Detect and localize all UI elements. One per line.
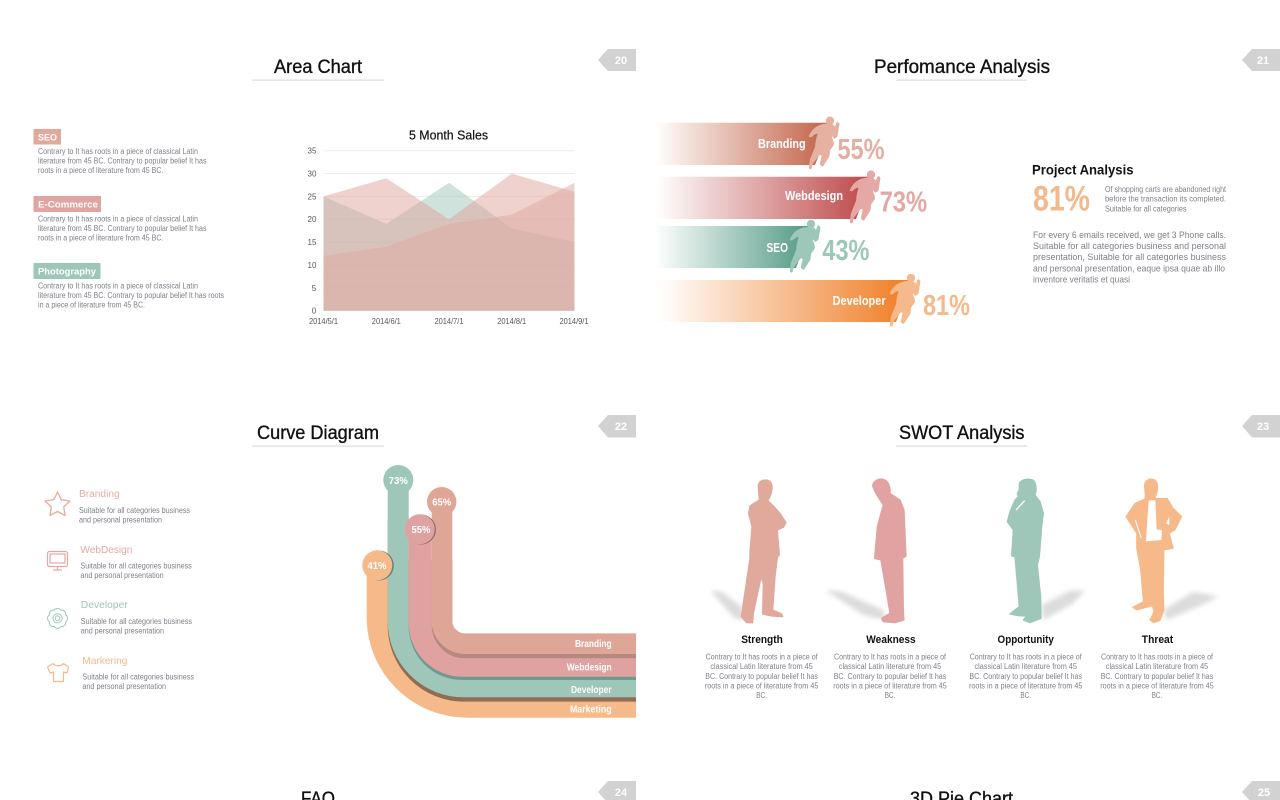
- area chart: 5 Month Sales: 2014/7/1: [434, 317, 464, 326]
- stat: 81%: 81%: [1033, 180, 1090, 219]
- area chart: 5 Month Sales: 2014/5/1: [309, 317, 339, 326]
- page badge 21: 21: [1257, 55, 1269, 67]
- page badge 24: 24: [615, 787, 628, 799]
- page badge 20: 20: [615, 55, 627, 67]
- text block: Strength: Strength: [741, 634, 783, 646]
- text block: Strength: BC.: [756, 691, 767, 700]
- text block: Weakness: [833, 634, 947, 700]
- text block: Weakness: BC. Contrary to popular belief It has: [834, 672, 946, 681]
- text block: Strength: Contrary to It has roots in a piece of: [706, 652, 818, 662]
- text block: Threat: BC.: [1152, 691, 1162, 700]
- area chart: 5 Month Sales: 35: [308, 147, 317, 156]
- bar: SEO 43%: [650, 221, 870, 271]
- text block: Weakness: classical Latin literature from 45: [839, 662, 942, 671]
- icon: monitor: [48, 552, 68, 570]
- page badge 22: [598, 415, 636, 438]
- panel: 3D pie chart slide (cropped): [910, 781, 1280, 800]
- page badge 25: [1242, 781, 1280, 800]
- text block: Opportunity: Contrary to It has roots in a piece of: [970, 652, 1082, 662]
- text block: Strength: [705, 634, 819, 700]
- text block: E-Commerce: E-Commerce: [38, 200, 98, 210]
- bar: SEO 43%: SEO: [766, 240, 788, 255]
- circle 65%: [427, 487, 456, 516]
- area chart: 5 Month Sales: 2014/8/1: [497, 317, 527, 326]
- page badge 21: [1242, 49, 1280, 71]
- legend item: WebDesign: WebDesign: [80, 545, 132, 556]
- text block: Photography: in a piece of literature from 45 BC.: [38, 300, 145, 310]
- page badge 22: 22: [615, 421, 627, 433]
- circle 55%: 55%: [412, 524, 431, 536]
- legend item: Developer: and personal presentation: [81, 626, 164, 636]
- text block: E-Commerce: [34, 196, 206, 242]
- text block: Threat: Threat: [1142, 634, 1174, 646]
- page badge 25: 25: [1258, 787, 1270, 799]
- text block: Project Analysis: inventore veritatis et quasi: [1033, 274, 1130, 286]
- page badge 20: [598, 49, 636, 71]
- band label: Developer: Developer: [571, 684, 612, 696]
- heading: Curve Diagram: Curve Diagram: [257, 423, 379, 444]
- figure: Threat: [1126, 479, 1218, 623]
- figure: Weakness: [825, 479, 906, 623]
- page badge 23: [1242, 415, 1280, 438]
- heading: Area Chart: Area Chart: [274, 57, 363, 78]
- text block: Opportunity: [969, 634, 1083, 700]
- text block: Strength: classical Latin literature from 45: [710, 662, 813, 671]
- legend item: Branding: [45, 489, 190, 524]
- legend item: WebDesign: Suitable for all categories business: [80, 562, 192, 570]
- text block: Project Analysis: Of shopping carts are abandoned right: [1105, 185, 1227, 194]
- text block: E-Commerce: literature from 45 BC. Contrary to popular belief It has: [38, 224, 206, 233]
- band: Developer: [398, 480, 636, 691]
- legend item: Branding: Suitable for all categories business: [79, 506, 190, 515]
- page badge 23: 23: [1257, 421, 1269, 433]
- text block: Photography: literature from 45 BC. Contrary to popular belief It has roots: [38, 291, 224, 300]
- text block: Strength: BC. Contrary to popular belief It has: [705, 672, 818, 681]
- text block: Photography: [34, 263, 224, 310]
- text block: Project Analysis: before the transaction its completed.: [1105, 195, 1226, 204]
- panel: SWOT analysis slide: [705, 415, 1280, 700]
- icon: t-shirt: [48, 664, 68, 682]
- legend item: Markering: and personal presentation: [82, 682, 166, 691]
- area chart: 5 Month Sales: 30: [308, 170, 317, 178]
- text block: Project Analysis: Suitable for all categories: [1105, 204, 1186, 214]
- area chart: 5 Month Sales: 15: [308, 238, 317, 247]
- text block: Strength: roots in a piece of literature from 45: [705, 682, 819, 690]
- band: Webdesign: [420, 530, 636, 668]
- heading: SWOT Analysis: SWOT Analysis: [899, 423, 1024, 444]
- text block: Project Analysis: Project Analysis: [1032, 162, 1134, 178]
- text block: Weakness: Weakness: [866, 634, 916, 646]
- area chart: 5 Month Sales: 2014/9/1: [560, 317, 589, 326]
- bar: Branding 55%: 55%: [838, 134, 885, 166]
- legend item: Markering: Markering: [82, 656, 127, 667]
- bar: Webdesign 73%: 73%: [880, 187, 927, 219]
- panel: performance analysis slide: [650, 49, 1280, 325]
- bar: Developer 81%: [650, 275, 970, 325]
- circle 55%: [405, 514, 436, 544]
- text block: Opportunity: BC.: [1020, 691, 1031, 700]
- bar: Branding 55%: Branding: [758, 136, 806, 151]
- band label: Marketing: Marketing: [570, 704, 612, 716]
- icon: gear: [48, 608, 67, 628]
- circle 73%: 73%: [389, 475, 408, 487]
- bar: Developer 81%: Developer: [833, 293, 886, 308]
- text block: Threat: Contrary to It has roots in a piece of: [1101, 652, 1214, 662]
- area chart: 5 Month Sales: 5: [312, 284, 317, 293]
- text block: SEO: SEO: [38, 132, 57, 144]
- text block: E-Commerce: roots in a piece of literature from 45 BC.: [38, 234, 164, 242]
- bar: Webdesign 73%: Webdesign: [785, 188, 843, 203]
- curve chart: [362, 465, 636, 716]
- text block: E-Commerce: Contrary to It has roots in a piece of classical Latin: [38, 214, 198, 224]
- icon: star: [45, 492, 70, 516]
- text block: Photography: Contrary to It has roots in a piece of classical Latin: [38, 282, 198, 290]
- legend item: WebDesign: [48, 545, 192, 580]
- bar: Branding 55%: [650, 118, 885, 168]
- text block: Project Analysis: Suitable for all categories business and personal: [1033, 241, 1226, 252]
- chart title: 5 Month Sales: [409, 128, 488, 142]
- area chart: 5 Month Sales: 10: [308, 261, 317, 270]
- text block: SEO: roots in a piece of literature from 45 BC.: [38, 166, 164, 175]
- band label: Branding: Branding: [575, 638, 612, 650]
- bar: Developer 81%: 81%: [923, 290, 970, 322]
- heading: Perfomance Analysis: Perfomance Analysis: [874, 57, 1050, 78]
- legend item: Developer: Developer: [81, 600, 128, 611]
- text block: Opportunity: classical Latin literature from 45: [974, 662, 1077, 671]
- text block: Weakness: Contrary to It has roots in a piece of: [834, 652, 947, 662]
- text block: Project Analysis: presentation, Suitable for all categories business: [1033, 252, 1226, 263]
- area chart: 5 Month Sales: 25: [308, 192, 317, 201]
- text block: Weakness: BC.: [885, 691, 895, 700]
- area chart: 5 Month Sales: 2014/6/1: [372, 317, 401, 326]
- figure: Strength: [710, 480, 786, 623]
- text block: Weakness: roots in a piece of literature from 45: [833, 682, 947, 690]
- text block: Opportunity: Opportunity: [998, 634, 1055, 646]
- band label: Webdesign: Webdesign: [567, 662, 612, 674]
- circle 41%: [362, 550, 394, 580]
- legend item: Markering: [48, 656, 194, 691]
- area chart: 5 Month Sales: 0: [312, 307, 317, 316]
- bar: Webdesign 73%: [650, 172, 927, 222]
- legend item: Developer: [48, 600, 192, 636]
- text block: Threat: roots in a piece of literature from 45: [1100, 682, 1214, 690]
- text block: Threat: [1100, 634, 1214, 700]
- circle 65%: 65%: [432, 496, 452, 508]
- panel: curve diagram slide: [45, 415, 636, 716]
- band: Branding: [442, 502, 636, 648]
- band: Marketing: [377, 565, 636, 707]
- legend item: Developer: Suitable for all categories business: [81, 617, 192, 626]
- legend item: Markering: Suitable for all categories business: [82, 672, 194, 682]
- text block: Project Analysis: and personal presentation, eaque ipsa quae ab illo: [1033, 264, 1225, 274]
- text block: Project Analysis: For every 6 emails received, we get 3 Phone calls.: [1033, 230, 1226, 241]
- text block: SEO: Contrary to It has roots in a piece of classical Latin: [38, 147, 198, 156]
- text block: Opportunity: BC. Contrary to popular belief It has: [969, 672, 1082, 681]
- text block: Threat: BC. Contrary to popular belief It has: [1101, 672, 1213, 681]
- text block: SEO: [34, 129, 206, 175]
- legend item: WebDesign: and personal presentation: [80, 571, 164, 580]
- area chart: 5 Month Sales: [308, 128, 589, 326]
- figure: Opportunity: [1007, 479, 1085, 623]
- panel: FAQ slide (cropped): [301, 781, 636, 800]
- page badge 24: [598, 781, 636, 800]
- text block: Opportunity: roots in a piece of literature from 45: [969, 682, 1083, 690]
- text block: Photography: Photography: [38, 266, 97, 278]
- text block: Project Analysis: [1032, 162, 1227, 286]
- panel: area chart slide: [34, 49, 636, 326]
- circle 73%: [383, 465, 413, 495]
- circle 41%: 41%: [368, 560, 387, 572]
- text block: Threat: classical Latin literature from 45: [1106, 662, 1209, 671]
- legend item: Branding: Branding: [79, 489, 120, 500]
- bar: SEO 43%: 43%: [822, 235, 870, 267]
- legend item: Branding: and personal presentation: [79, 516, 162, 524]
- text block: SEO: literature from 45 BC. Contrary to popular belief It has: [38, 156, 206, 166]
- area chart: 5 Month Sales: 20: [308, 215, 317, 224]
